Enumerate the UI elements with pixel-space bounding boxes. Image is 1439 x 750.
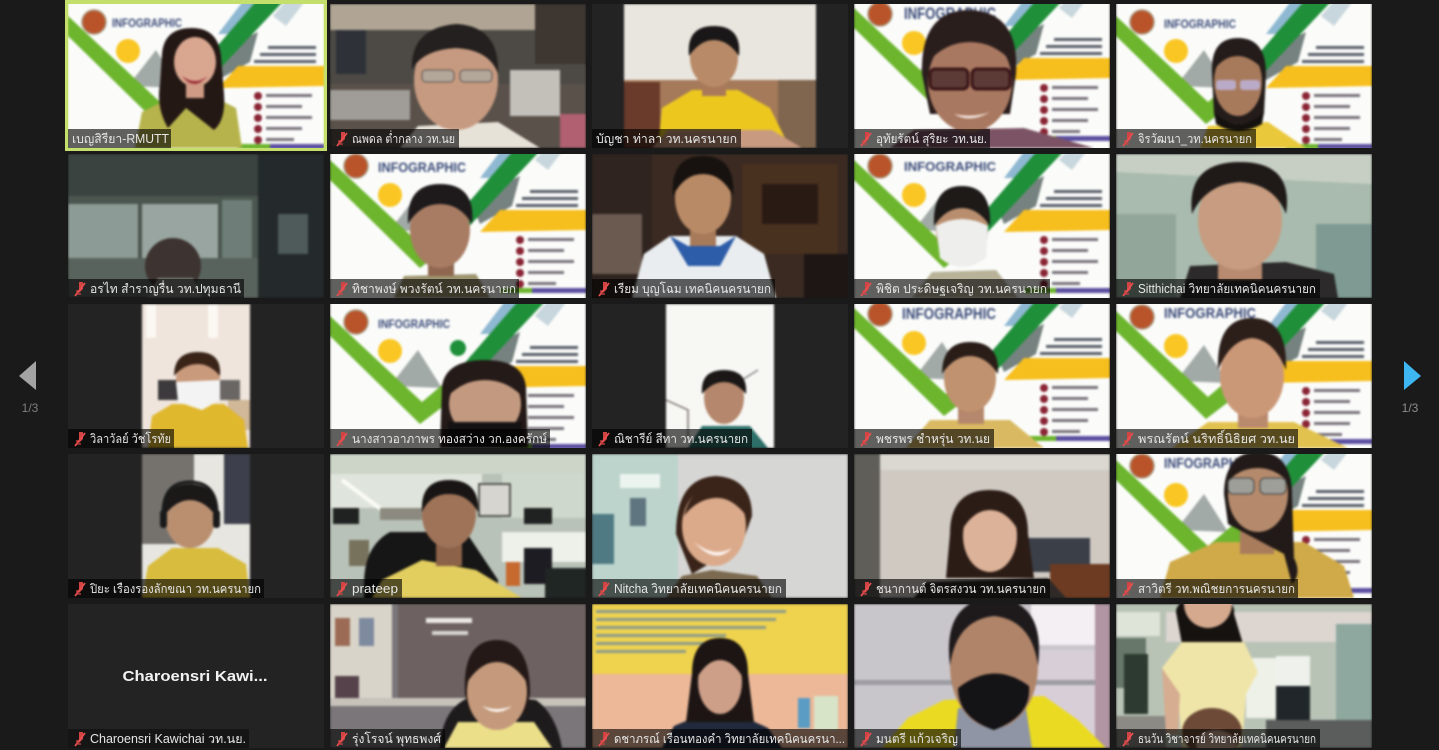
name tag: prateep xyxy=(352,582,398,596)
name tag: ทิชาพงษ์ พวงรัตน์ วท.นครนายก xyxy=(352,282,516,296)
video tile: woman before yellow notice board xyxy=(592,604,848,748)
name tag xyxy=(592,279,775,298)
video tile: man in white mask: INFOGRAPHIC xyxy=(904,159,997,174)
name tag: สาวิตรี วท.พณิชยการนครนายก xyxy=(1138,582,1295,596)
video tile: woman with long hair in office xyxy=(854,454,1110,598)
name tag xyxy=(330,579,402,598)
name tag: ณพดล ต่ำกลาง วท.นย xyxy=(352,130,455,146)
name tag xyxy=(854,729,961,748)
video tile: portrait man smiling xyxy=(592,304,848,448)
next page arrow xyxy=(1402,361,1421,415)
name tag: มนตรี แก้วเจริญ xyxy=(876,732,958,746)
video tile: man over poster: INFOGRAPHIC xyxy=(378,159,466,175)
name tag xyxy=(68,579,264,598)
centered participant name: Charoensri Kawi... xyxy=(122,668,268,685)
video tile: woman with glasses over poster xyxy=(854,0,1110,160)
video tile: man in yellow shirt xyxy=(592,4,848,148)
name tag: Nitcha วิทยาลัยเทคนิคนครนายก xyxy=(614,582,782,596)
name tag xyxy=(854,279,1050,298)
video tile: woman over poster xyxy=(854,304,1110,448)
video tile: woman with glasses over poster: INFOGRAPHIC xyxy=(904,4,996,23)
video tile: woman in yellow over poster xyxy=(1116,304,1372,448)
name tag xyxy=(68,729,249,748)
name tag: Charoensri Kawichai วท.นย. xyxy=(90,732,246,746)
name tag xyxy=(330,429,550,448)
name tag xyxy=(1116,729,1320,748)
name tag: อรไท สำราญรื่น วท.ปทุมธานี xyxy=(90,280,241,297)
name tag: ดชาภรณ์ เรือนทองคำ วิทยาลัยเทคนิคนครนา... xyxy=(614,732,845,746)
video tile: man with black mask xyxy=(854,598,1110,748)
name tag: อุทัยรัตน์ สุริยะ วท.นย. xyxy=(876,132,987,147)
video tile: woman low in frame with black mask xyxy=(330,304,586,448)
previous page counter: 1/3 xyxy=(22,401,39,415)
name tag: พชรพร ชำหรุ่น วท.นย xyxy=(876,432,990,447)
video tile: woman low in frame with black mask: INFOGRAPHIC xyxy=(378,317,450,331)
name tag xyxy=(1116,579,1298,598)
video tile: woman with glasses close to camera xyxy=(1116,454,1372,598)
video tile: young man close up xyxy=(1116,154,1372,298)
video tile: woman in dark wooden room xyxy=(592,154,848,298)
name tag: วิลาวัลย์ วัชโรทัย xyxy=(90,431,171,446)
video tile: camera off, Charoensri xyxy=(68,604,324,748)
name tag: นางสาวอาภาพร ทองสว่าง วก.องครักษ์ xyxy=(352,432,547,446)
video tile: man prateep in office xyxy=(330,454,586,598)
name tag xyxy=(68,429,174,448)
video tile: Nitcha smiling woman xyxy=(592,454,848,598)
video tile: dim room with windows xyxy=(68,154,324,298)
name tag xyxy=(592,729,848,748)
video tile: woman with reflective glasses xyxy=(1116,4,1372,148)
name tag xyxy=(330,729,445,748)
name tag xyxy=(592,579,786,598)
name tag: เรียม บุญโฉม เทคนิคนครนายก xyxy=(614,281,771,297)
name tag: เบญสิรียา-RMUTT xyxy=(72,132,169,146)
name tag: จิรวัฒนา_วท.นครนายก xyxy=(1138,132,1252,146)
name tag: ปิยะ เรืองรองลักขณา วท.นครนายก xyxy=(90,582,261,596)
name tag: พิชิต ประดิษฐเจริญ วท.นครนายก xyxy=(876,282,1047,296)
name tag xyxy=(1116,429,1298,448)
video tile: speaker with highlighted border: INFOGRAPHIC xyxy=(112,16,182,30)
video tile: woman with reflective glasses: INFOGRAPHIC xyxy=(1164,17,1236,31)
name tag: รุ่งโรจน์ พุทธพงศ์ xyxy=(352,731,441,747)
name tag: พรณรัตน์ นริทธิ์นิธิยศ วท.นย xyxy=(1138,429,1295,446)
video tile: man in white mask xyxy=(854,154,1110,298)
name tag xyxy=(592,429,752,448)
name tag xyxy=(1116,129,1256,148)
name tag xyxy=(854,579,1050,598)
name tag xyxy=(330,129,459,148)
name tag: Sitthichai วิทยาลัยเทคนิคนครนายก xyxy=(1138,282,1316,296)
previous page arrow xyxy=(19,361,39,415)
video tile: smiling woman in office xyxy=(330,604,586,748)
name tag: บัญชา ท่าลา วท.นครนายก xyxy=(596,132,737,146)
video tile: speaker with highlighted border xyxy=(65,0,327,151)
next page counter: 1/3 xyxy=(1402,401,1419,415)
name tag xyxy=(68,279,244,298)
video tile: portrait man with headphones xyxy=(68,454,324,598)
video tile: man in office xyxy=(330,4,586,148)
video tile: woman over poster: INFOGRAPHIC xyxy=(902,306,996,323)
video tile: portrait woman with white mask xyxy=(68,304,324,448)
name tag xyxy=(330,279,519,298)
video tile: woman in yellow over poster: INFOGRAPHIC xyxy=(1164,305,1256,322)
name tag: ณิชารีย์ สีทา วท.นครนายก xyxy=(614,432,748,446)
video tile: standing woman in classroom xyxy=(1116,604,1372,748)
name tag xyxy=(854,429,994,448)
name tag xyxy=(1116,279,1320,298)
video tile: woman with glasses close to camera: INFOGRAPHIC xyxy=(1164,455,1250,472)
video tile: man over poster xyxy=(330,154,586,298)
name tag: ชนากานต์ จิตรสงวน วท.นครนายก xyxy=(876,582,1046,596)
name tag xyxy=(854,129,990,148)
name tag: ธนวัน วิชาจารย์ วิทยาลัยเทคนิคนครนายก xyxy=(1138,732,1316,746)
